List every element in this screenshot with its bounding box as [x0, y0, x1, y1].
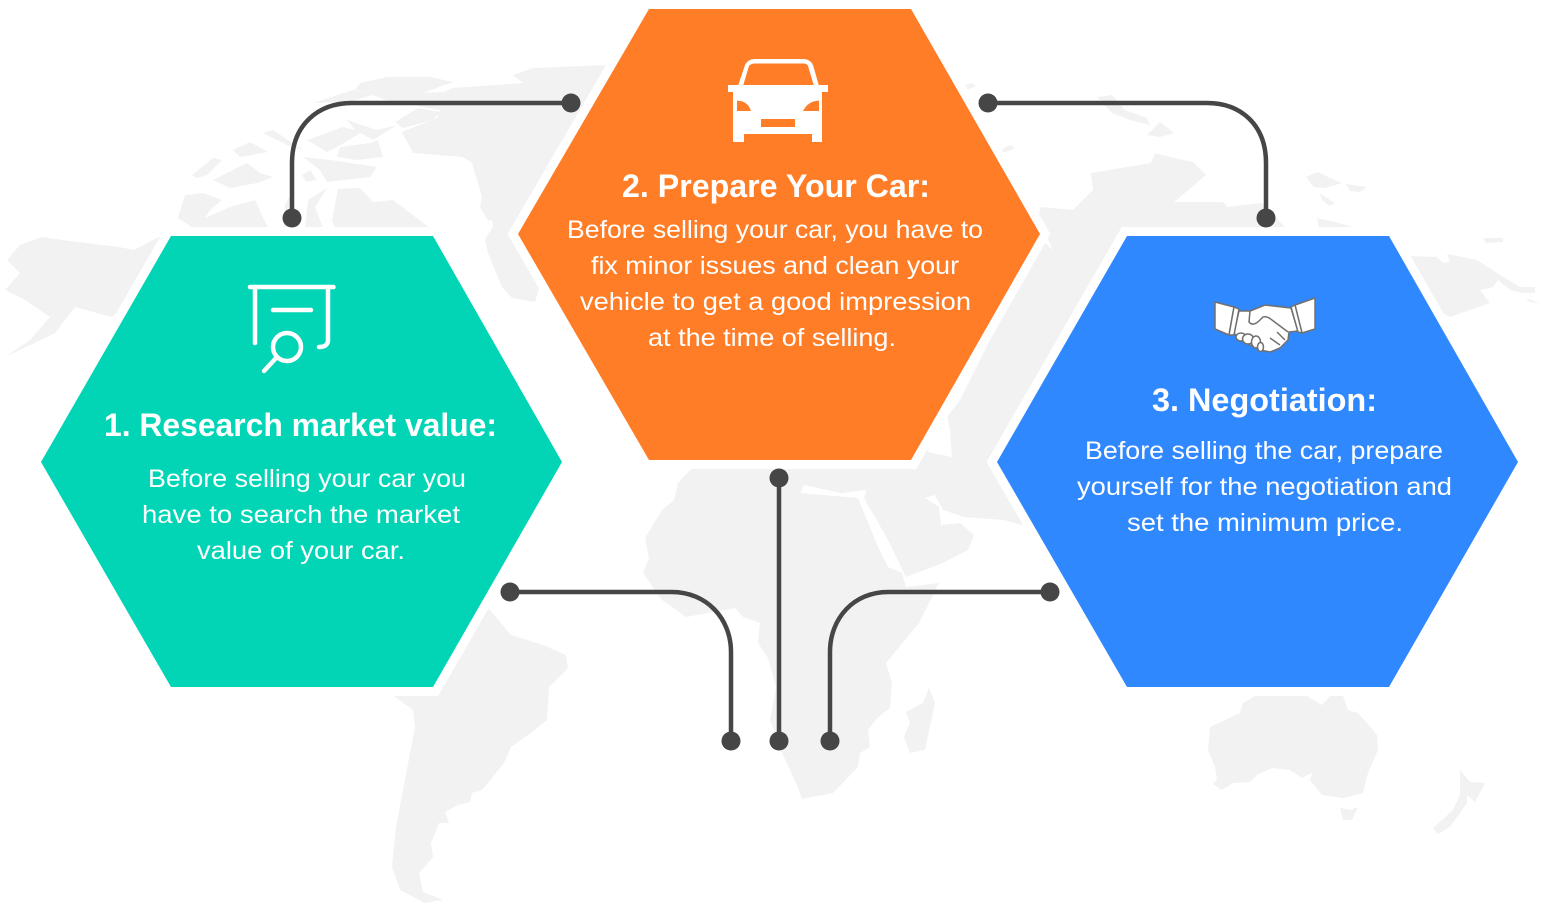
text: step 3 description: yourself for the negotiation and [1077, 473, 1452, 501]
connector: step 3 downward [820, 582, 1060, 750]
text: step 1 description: have to search the market [142, 501, 460, 529]
text: step 1 description [142, 465, 466, 565]
text: step 2 description: at the time of selling. [648, 324, 896, 352]
panel: step 3 negotiation [997, 236, 1518, 687]
hexagon: blue [997, 236, 1518, 687]
panel: step 1 research market value [41, 236, 562, 687]
text: step 3 description: set the minimum price. [1127, 509, 1403, 537]
text: step 1 description: Before selling your car you [148, 465, 466, 493]
icon: car front [728, 59, 828, 142]
text: step 3 description: Before selling the car, prepare [1085, 437, 1443, 465]
text: step 3 description [1077, 437, 1452, 537]
heading: step 2: 2. Prepare Your Car: [622, 168, 930, 204]
text: step 2 description: Before selling your car, you have to [567, 216, 983, 244]
hexagon: teal [41, 236, 562, 687]
heading: step 3: 3. Negotiation: [1152, 382, 1377, 418]
icon: document with magnifier [250, 287, 334, 371]
text: step 1 description: value of your car. [197, 537, 405, 565]
heading: step 1: 1. Research market value: [104, 407, 497, 443]
icon: handshake [1215, 298, 1315, 352]
panel: step 2 prepare your car [518, 9, 1040, 460]
text: step 2 description [567, 216, 983, 352]
connector: step 2 to step 3 [978, 94, 1276, 228]
connector: step 1 downward [500, 582, 740, 750]
connector: step 2 downward [770, 468, 788, 750]
text: step 2 description: fix minor issues and clean your [591, 252, 959, 280]
hexagon: orange [518, 9, 1040, 460]
connector: step 1 to step 2 [282, 94, 580, 228]
text: step 2 description: vehicle to get a good impression [580, 288, 971, 316]
